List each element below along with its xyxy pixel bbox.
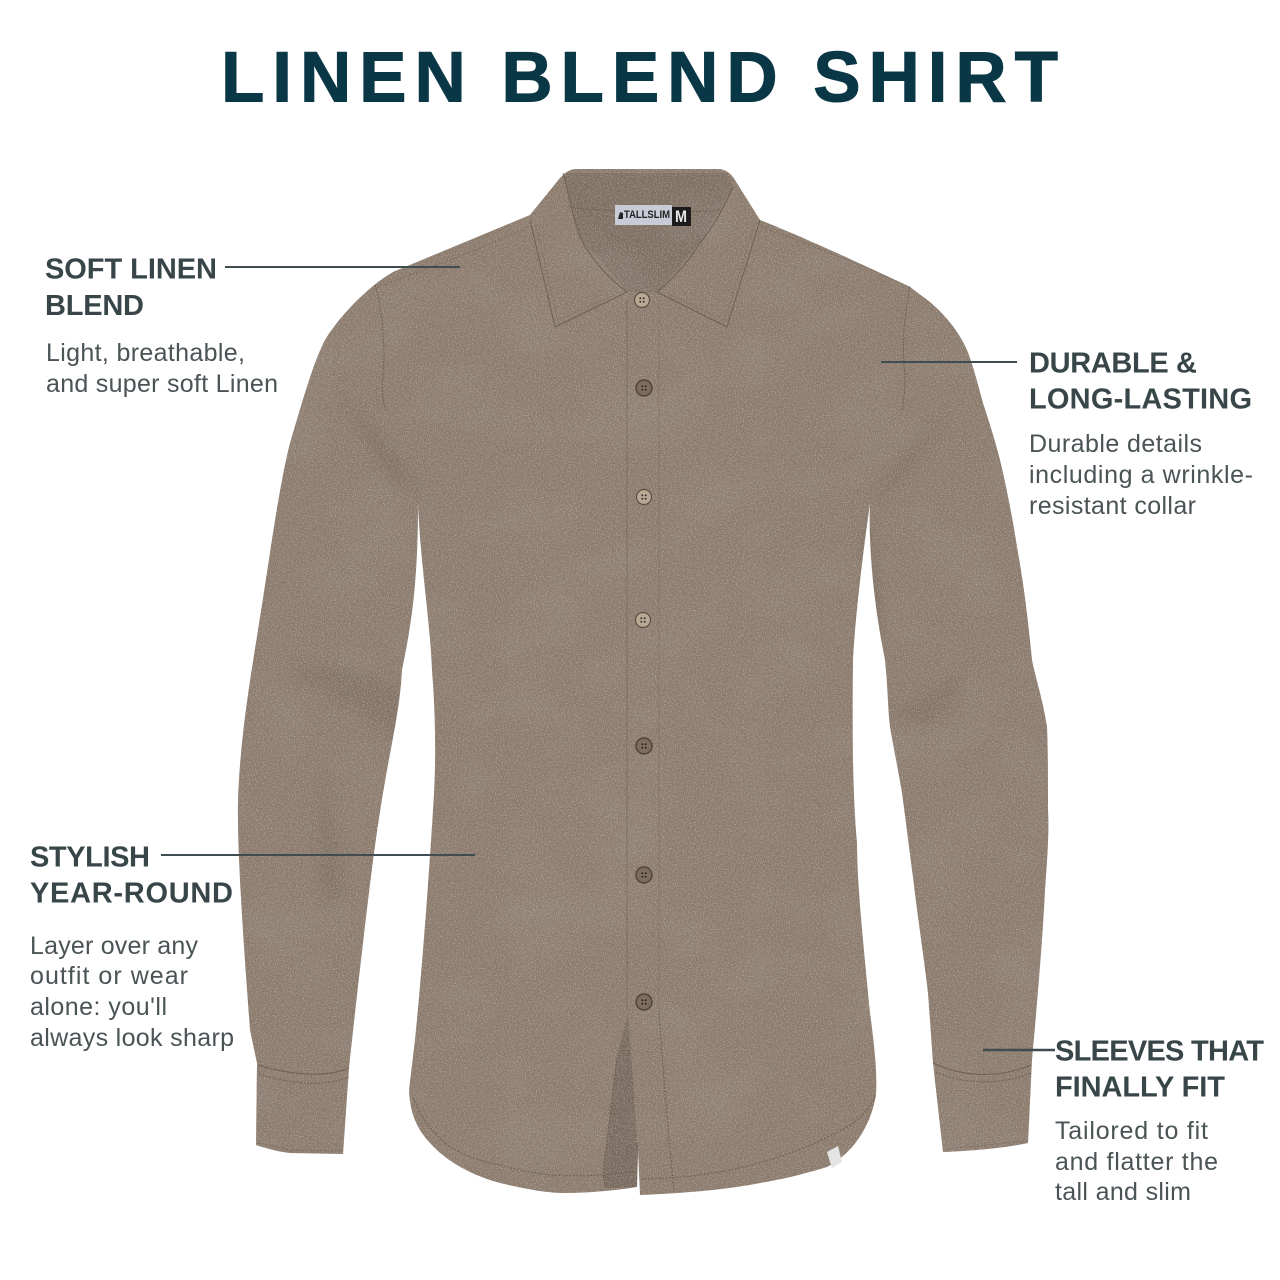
callout: durable and long-lasting: resistant collar <box>1029 492 1196 520</box>
callout: sleeves that finally fit: FINALLY FIT <box>1055 1072 1225 1104</box>
callout: stylish year-round: always look sharp <box>30 1024 234 1052</box>
callout: stylish year-round: STYLISH <box>30 842 150 874</box>
neck label: M <box>675 207 687 226</box>
under-placket at hem <box>603 1013 638 1188</box>
callout: durable and long-lasting <box>881 348 1253 520</box>
title: LINEN BLEND SHIRT <box>221 38 1058 118</box>
callout: stylish year-round: YEAR-ROUND <box>30 878 233 910</box>
callout: soft linen blend: Light, breathable, <box>46 339 245 367</box>
hem tag <box>827 1146 842 1168</box>
callout: durable and long-lasting: Durable details <box>1029 430 1202 458</box>
buttons <box>634 292 652 1010</box>
shirt <box>230 160 1060 1205</box>
callout: soft linen blend: and super soft Linen <box>46 370 278 398</box>
neck label: TALLSLIM <box>624 209 670 221</box>
callout: stylish year-round: Layer over any <box>30 932 198 960</box>
callout: stylish year-round: outfit or wear <box>30 962 188 990</box>
neck label <box>615 205 691 226</box>
callout: soft linen blend: SOFT LINEN <box>45 254 217 286</box>
callout: durable and long-lasting: LONG-LASTING <box>1029 384 1252 416</box>
callout: stylish year-round: alone: you'll <box>30 993 167 1021</box>
callout: sleeves that finally fit: SLEEVES THAT <box>1055 1036 1264 1068</box>
callout: durable and long-lasting: including a wrinkle- <box>1029 461 1253 489</box>
stitching and seams <box>258 173 1031 1192</box>
callout: soft linen blend <box>45 254 460 398</box>
callout: stylish year-round <box>30 842 475 1052</box>
callout: sleeves that finally fit: and flatter the <box>1055 1148 1218 1176</box>
shirt fabric <box>230 160 1060 1205</box>
callout: sleeves that finally fit: tall and slim <box>1055 1178 1191 1206</box>
collar interior <box>563 173 733 292</box>
callout: sleeves that finally fit <box>983 1036 1264 1206</box>
callout: sleeves that finally fit: Tailored to fit <box>1055 1117 1208 1145</box>
callout: durable and long-lasting: DURABLE & <box>1029 348 1197 380</box>
callout: soft linen blend: BLEND <box>45 290 144 322</box>
